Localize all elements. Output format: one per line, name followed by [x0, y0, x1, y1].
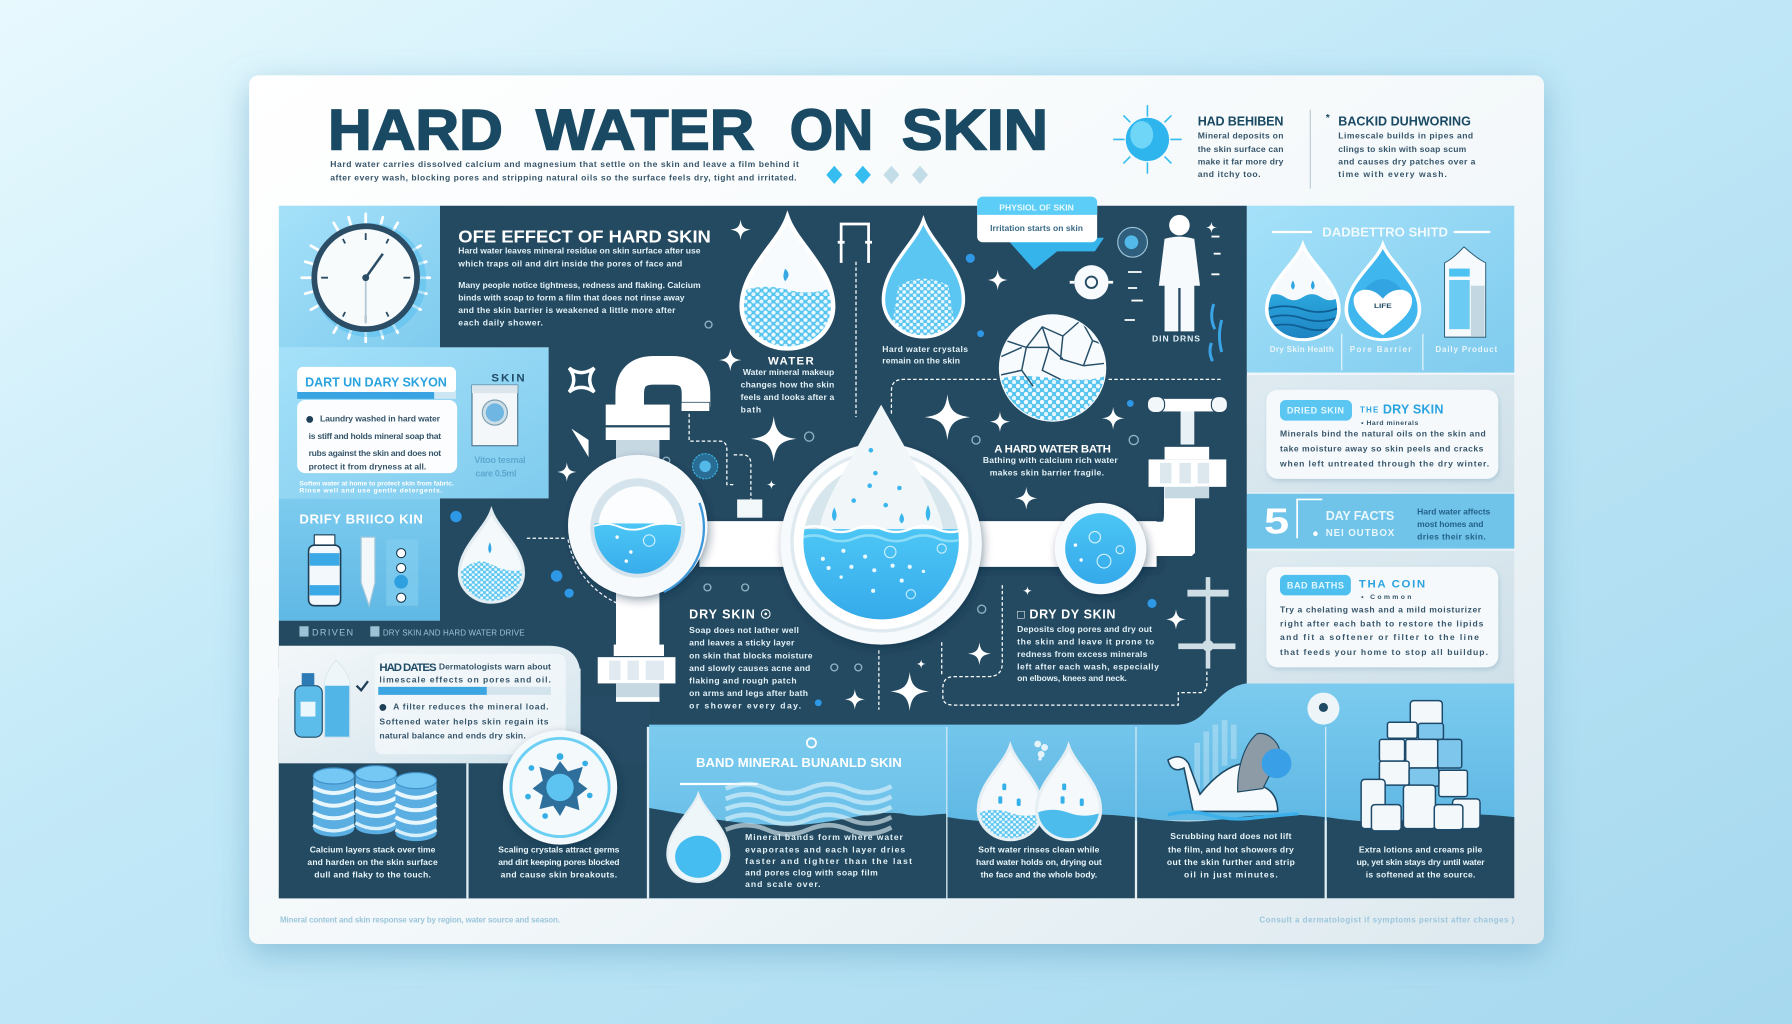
body text: Mineral bands form where water: [745, 832, 904, 842]
body text: and scale over.: [745, 879, 821, 889]
header note: hard benefit: HAD BEHIBEN: [1198, 115, 1283, 129]
icon: washing machine: [472, 385, 518, 446]
column labels: Daily Product: [1435, 345, 1497, 354]
title: WATER: [536, 99, 754, 163]
legend strip: DRIVEN: [312, 627, 353, 637]
header note: hard benefit: and itchy too.: [1198, 169, 1261, 179]
callout text card: Dermatologists warn about: [439, 662, 551, 672]
callout text card: HAD DATES: [379, 662, 437, 674]
panel: dry skin card: [1247, 375, 1514, 493]
caption: is softened at the source.: [1366, 870, 1475, 880]
body text: evaporates and each layer dries: [745, 845, 905, 855]
pill label: BAD BATHS: [1287, 581, 1344, 591]
footer note right: Consult a dermatologist if symptoms persist after changes ): [1259, 915, 1515, 924]
text block: effect of hard skin: OFE EFFECT OF HARD SKIN: [458, 226, 711, 246]
panel: two drops: [947, 741, 1135, 898]
body text: faster and tighter than the last: [745, 856, 912, 866]
lower left stem: [598, 589, 675, 702]
card body: [1279, 429, 1489, 468]
panel footnote: Rinse well and use gentle detergents.: [299, 488, 442, 495]
card body: Try a chelating wash and a mild moisturizer: [1280, 605, 1482, 615]
card heading: • Hard minerals: [1361, 420, 1418, 427]
small icon: [807, 738, 816, 747]
icon: blue orb: [1118, 227, 1147, 257]
card heading: THA COIN: [1359, 578, 1425, 590]
panel: laundry and dry skin: [279, 347, 549, 498]
text block: dry by skin right: [1017, 607, 1159, 683]
card body: take moisture away so skin peels and cracks: [1280, 443, 1484, 453]
card body: when left untreated through the dry winter.: [1279, 458, 1489, 468]
text block: dry skin left: on arms and legs after bath: [689, 688, 808, 698]
stat number: 5: [1264, 501, 1289, 542]
icon: drop left: [978, 746, 1042, 847]
panel: clock: [279, 206, 440, 347]
text block: water: feels and looks after a: [741, 392, 835, 402]
text block: dry skin left: [689, 607, 813, 711]
icon: clock: [302, 214, 430, 342]
header note: building: [1326, 113, 1476, 179]
icon: container stack: [1361, 701, 1480, 831]
text block: dry by skin right: redness from excess minerals: [1017, 649, 1148, 659]
header note: building: *: [1326, 113, 1330, 124]
caption: and harden on the skin surface: [307, 857, 438, 867]
card body: and fit a softener or filter to the line: [1280, 632, 1479, 642]
bottom panel dividers: [466, 727, 1326, 898]
bullet: [1313, 531, 1318, 536]
caption: [1357, 845, 1485, 880]
text block: a hard water bath: [983, 444, 1118, 477]
stat strip: [1247, 494, 1514, 549]
caption: out the skin further and strip: [1167, 857, 1295, 867]
panel: main dark central board: [279, 206, 1247, 725]
caption: Calcium layers stack over time: [310, 845, 436, 855]
header note: building: and causes dry patches over a: [1338, 157, 1476, 167]
header note: building: Limescale builds in pipes and: [1338, 130, 1473, 140]
text: drop caption: Hard water crystals: [882, 344, 968, 354]
text block: water: WATER: [768, 356, 814, 368]
panel: right column top: [1247, 206, 1514, 373]
figure annotations: [1125, 237, 1222, 361]
icon: speckled drop: [459, 511, 523, 610]
bracket: [1297, 499, 1322, 538]
title: ON: [790, 99, 873, 163]
title: [328, 99, 1048, 163]
text block: dry by skin right: □ DRY DY SKIN: [1017, 607, 1115, 621]
icon: heart drop: LIFE: [1374, 301, 1392, 310]
card header: DART UN DARY SKYON: [305, 375, 447, 389]
panel: dry skin products: [279, 498, 440, 621]
caption: Soft water rinses clean while: [978, 845, 1100, 855]
card body: Minerals bind the natural oils on the skin and: [1280, 429, 1486, 439]
small scale icon: [693, 454, 718, 479]
header note: hard benefit: the skin surface can: [1198, 144, 1283, 154]
title: SKIN: [902, 99, 1048, 163]
card heading: • Common: [1361, 594, 1411, 601]
icon: cracked skin circle: [999, 314, 1111, 425]
header note: hard benefit: Mineral deposits on: [1198, 130, 1283, 140]
icon: dispenser: [386, 539, 418, 606]
text block: effect of hard skin: which traps oil and dirt inside the pores of face and: [457, 258, 682, 268]
text block: dry by skin right: on elbows, knees and neck.: [1017, 673, 1127, 683]
stat text: [1417, 506, 1491, 541]
washer caption: [474, 455, 526, 479]
subtitle: [330, 159, 799, 183]
text block: water: bath: [741, 405, 761, 415]
text block: dry skin left: and leaves a sticky layer: [689, 638, 795, 648]
text block: a hard water bath: A HARD WATER BATH: [994, 444, 1111, 456]
right valve: [1147, 397, 1227, 498]
column labels: Pore Barrier: [1350, 345, 1411, 354]
column labels: [1270, 345, 1497, 354]
text block: effect of hard skin: binds with soap to form a film that does not rinse away: [458, 293, 685, 303]
header note: hard benefit: make it far more dry: [1198, 157, 1284, 167]
icon: wave drop: [1267, 245, 1339, 347]
caption: dull and flaky to the touch.: [314, 870, 431, 880]
caption: Scrubbing hard does not lift: [1170, 831, 1292, 841]
panel: splash badge: [469, 730, 647, 898]
caption: Scaling crystals attract germs: [498, 845, 620, 855]
caption: [976, 845, 1102, 880]
icon: blue drop with deposits: [883, 220, 963, 342]
pill label: DRIED SKIN: [1287, 406, 1344, 416]
text block: water: changes how the skin: [741, 379, 834, 389]
subtitle: after every wash, blocking pores and stripping natural oils so the surface feels dry, tight and irritated.: [330, 173, 797, 183]
footer note left: Mineral content and skin response vary by region, water source and season.: [280, 915, 560, 924]
card heading: THE: [1360, 406, 1379, 415]
text block: a hard water bath: Bathing with calcium rich water: [983, 455, 1118, 465]
panel footnote: [299, 481, 454, 495]
text block: dry by skin right: left after each wash, especially: [1017, 662, 1159, 672]
pipe system: [568, 370, 1227, 702]
lower-left dark backing: [279, 697, 649, 898]
icon: bottle: [309, 535, 341, 606]
panel: dry skin products: DRIFY BRIICO KIN: [299, 511, 423, 526]
panel: stacked containers: [1327, 701, 1514, 898]
header note: hard benefit: [1198, 115, 1284, 179]
pale shower rays: [1194, 720, 1237, 789]
icon: lotion bottle: [1445, 247, 1486, 337]
card heading: [1360, 403, 1443, 427]
caption: the film, and hot showers dry: [1168, 845, 1294, 855]
icon: tube: [361, 537, 375, 606]
stat text: most homes and: [1417, 519, 1483, 529]
text block: effect of hard skin: [457, 226, 711, 328]
icon: small splash: [1034, 741, 1048, 761]
legend strip: DRY SKIN AND HARD WATER DRIVE: [383, 628, 525, 637]
heading rules: [1272, 231, 1490, 233]
icon: target dial: [1070, 265, 1113, 299]
callout text card: A filter reduces the mineral load.: [393, 702, 549, 712]
caption: up, yet skin stays dry until water: [1357, 857, 1485, 867]
icon: bathing person: [1168, 733, 1298, 819]
right-side light background band: [649, 683, 1514, 821]
horizontal pipe: [699, 486, 1186, 567]
callout: physiology note: Irritation starts on skin: [990, 223, 1083, 233]
text block: dry skin left: on skin that blocks moisture: [689, 650, 813, 660]
icon: sun droplet: [1113, 105, 1182, 174]
caption: [1167, 831, 1295, 880]
decorative sparkles: [450, 219, 1217, 711]
callout text card: [375, 654, 566, 754]
heading: BAND MINERAL BUNANLD SKIN: [696, 755, 902, 770]
icon: drop right: [1037, 746, 1101, 847]
center tank with drop: [781, 405, 982, 645]
panel: bather: [1137, 720, 1325, 898]
figure annotations: DIN DRNS: [1152, 334, 1200, 344]
pointer line: [680, 783, 758, 785]
pill label: [1280, 400, 1352, 421]
caption: [307, 845, 438, 880]
card body: [1280, 605, 1488, 657]
text block: dry by skin right: the skin and leave it prone to: [1017, 637, 1154, 647]
icon: T-valve: [1178, 577, 1235, 669]
icon: small tap outline: [838, 224, 872, 263]
subtitle: Hard water carries dissolved calcium and magnesium that settle on the skin and leave a film behind it: [330, 159, 799, 169]
washer caption: care 0.5ml: [475, 469, 517, 479]
text block: effect of hard skin: Hard water leaves mineral residue on skin surface after use: [458, 246, 701, 256]
legend strip: [299, 626, 525, 637]
caption: and dirt keeping pores blocked: [498, 857, 619, 867]
panel footnote: Soften water at home to protect skin from fabric.: [299, 481, 454, 488]
icon: blue drop: [667, 794, 729, 882]
callout text card: Softened water helps skin regain its: [379, 717, 549, 727]
text: drop caption: remain on the skin: [882, 355, 960, 365]
header divider: [1310, 110, 1311, 189]
body text: and pores clog with soap film: [745, 867, 878, 877]
pill label: [1280, 575, 1351, 595]
callout: physiology note: [977, 197, 1104, 270]
icon: human figure: [1159, 215, 1200, 331]
title: HARD: [328, 99, 503, 163]
text block: dry skin left: flaking and rough patch: [689, 675, 797, 685]
stat text: dries their skin.: [1417, 531, 1486, 541]
wavy mineral bands: [726, 784, 891, 834]
stat label: DAY FACTS: [1326, 509, 1394, 523]
text block: dry skin left: Soap does not lather well: [689, 625, 799, 635]
card body: is stiff and holds mineral soap that: [309, 431, 441, 441]
text block: dry skin left: or shower every day.: [689, 701, 801, 711]
card body: protect it from dryness at all.: [309, 462, 426, 472]
column separators: [1342, 334, 1423, 370]
heading: DADBETTRO SHITD: [1322, 225, 1448, 240]
callout: physiology note: PHYSIOL OF SKIN: [999, 202, 1074, 212]
icon: drop with mineral deposits: [742, 217, 833, 359]
icon: pin bulb: [1307, 693, 1339, 725]
header note: building: BACKID DUHWORING: [1338, 115, 1471, 129]
callout text card: limescale effects on pores and oil.: [379, 674, 551, 684]
text block: effect of hard skin: Many people notice tightness, redness and flaking. Calcium: [458, 280, 701, 290]
caption: Extra lotions and creams pile: [1359, 845, 1483, 855]
icon: mineral splash circle: [503, 730, 617, 845]
icon: mineral stacks: [313, 766, 437, 841]
card body: right after each bath to restore the lipids: [1280, 618, 1484, 628]
stat label: [1326, 509, 1395, 539]
left tap arch: [606, 370, 710, 463]
text block: effect of hard skin: and the skin barrier is weakened a little more after: [458, 305, 676, 315]
callout text card: natural balance and ends dry skin.: [379, 730, 526, 740]
right gauge: [1055, 503, 1146, 594]
text block: effect of hard skin: each daily shower.: [458, 318, 543, 328]
text block: dry skin left: and slowly causes acne and: [689, 663, 810, 673]
panel: hard dates callout: [279, 646, 581, 763]
stat text: Hard water affects: [1417, 506, 1491, 516]
caption: and cause skin breakouts.: [501, 870, 617, 880]
caption: [498, 845, 620, 880]
panel: coin stacks: [279, 763, 466, 898]
icon: bottles: [295, 661, 368, 737]
header note: building: clings to skin with soap scum: [1338, 144, 1467, 154]
caption: oil in just minutes.: [1184, 870, 1278, 880]
text: drop caption: [882, 344, 968, 365]
column labels: Dry Skin Health: [1270, 345, 1334, 354]
panel: band mineral skin: [649, 727, 946, 898]
card heading: [1359, 578, 1425, 601]
dashed connectors: [527, 262, 1221, 710]
text block: water: [741, 356, 835, 415]
header note: building: time with every wash.: [1338, 169, 1447, 179]
panel: tips card: [1247, 551, 1514, 683]
card body: [297, 400, 457, 473]
left gauge: [568, 455, 707, 597]
diamond markers: [826, 166, 928, 184]
card body: Laundry washed in hard water: [320, 414, 441, 424]
skin label: SKIN: [491, 373, 525, 385]
text block: a hard water bath: makes skin barrier fragile.: [990, 467, 1104, 477]
infographic card: [249, 75, 1544, 944]
text block: dry by skin right: Deposits clog pores and dry out: [1017, 624, 1152, 634]
body text: [745, 832, 912, 889]
caption: the face and the whole body.: [981, 870, 1097, 880]
card header: [297, 367, 456, 399]
card body: that feeds your home to stop all buildup.: [1280, 647, 1488, 657]
caption: hard water holds on, drying out: [976, 857, 1102, 867]
card body: rubs against the skin and does not: [309, 448, 441, 458]
washer caption: Vitoo tesmal: [474, 455, 526, 465]
card heading: DRY SKIN: [1383, 403, 1443, 417]
icon: heart drop: [1346, 245, 1419, 340]
text block: water: Water mineral makeup: [743, 367, 834, 377]
small connector box: [737, 499, 762, 518]
text block: dry skin left: DRY SKIN ☉: [689, 607, 771, 621]
stat label: NEI OUTBOX: [1326, 528, 1395, 539]
